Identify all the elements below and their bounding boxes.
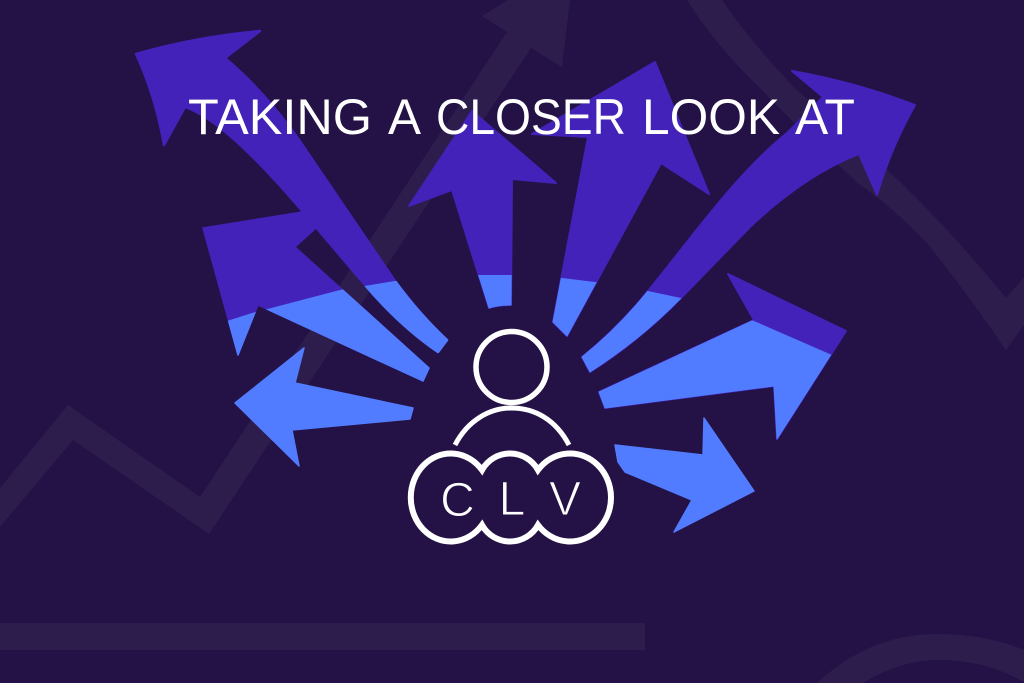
- arrow: far upper left: [136, 31, 447, 352]
- title: TAKING: [188, 89, 372, 145]
- title: AT: [795, 89, 855, 145]
- arrow: left: [235, 348, 413, 466]
- arrow: up right: [532, 62, 709, 336]
- background: ghost curved line: [687, 0, 1024, 350]
- title: LOOK: [642, 89, 780, 145]
- background: ghost bar: [0, 623, 645, 650]
- background: ghost arc: [817, 634, 1024, 683]
- title: A: [388, 89, 422, 145]
- icon: person with CLV cloud: [411, 332, 611, 542]
- icon: shoulders: [455, 408, 569, 445]
- title: CLOSER: [436, 89, 626, 145]
- arrows fan: [136, 31, 915, 532]
- icon: head: [476, 332, 547, 402]
- CLV letters: C: [440, 474, 475, 527]
- arrow: wide left: [203, 212, 429, 381]
- arrow: far upper right: [582, 71, 915, 372]
- icon: cloud outline: [411, 453, 611, 542]
- background: ghost growth arrow chart: [0, 0, 570, 534]
- CLV letters: L: [499, 473, 525, 526]
- arrow: lower right: [615, 418, 754, 532]
- title: [188, 89, 855, 145]
- arrow: wide right: [599, 274, 846, 439]
- CLV letters: [440, 473, 581, 527]
- CLV letters: V: [549, 473, 581, 526]
- arrow: up: [409, 111, 556, 308]
